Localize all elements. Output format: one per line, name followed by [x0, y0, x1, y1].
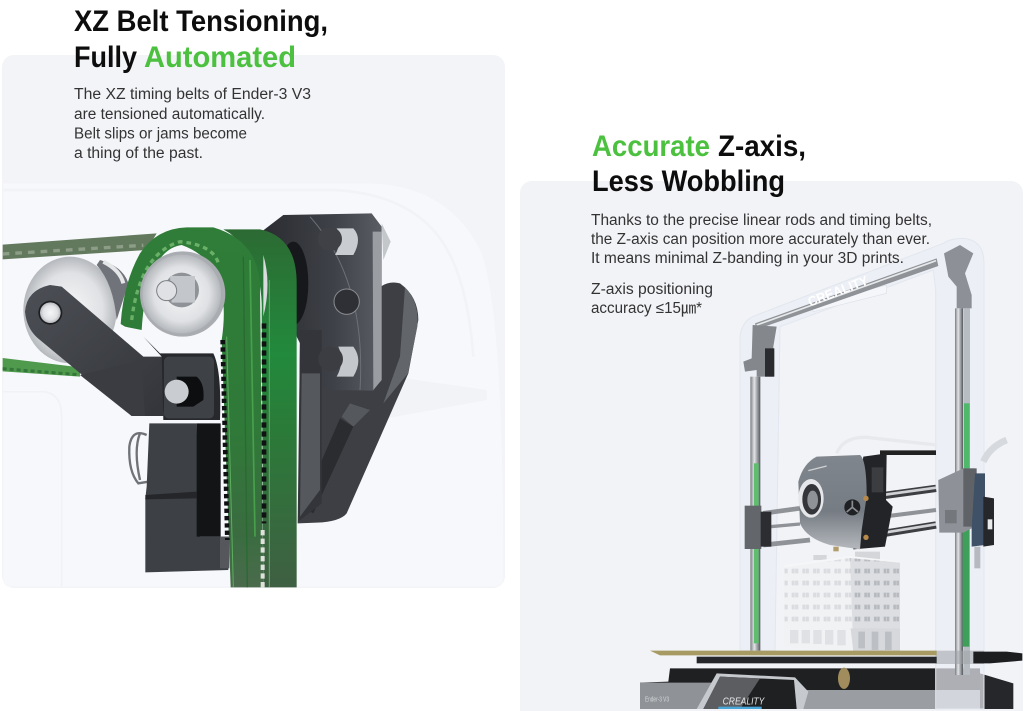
- text block: belt description: are tensioned automatically.: [74, 106, 265, 123]
- X-axis rods left: [763, 508, 810, 545]
- front green belt wrapping pulley: [121, 227, 263, 587]
- heading: XZ Belt Tensioning, Fully Automated: [74, 5, 328, 74]
- text block: belt description: Belt slips or jams become: [74, 126, 247, 142]
- text block: belt description: [74, 86, 311, 162]
- text block: Z-axis accuracy spec: [591, 281, 713, 317]
- heading: Accurate Z-axis, Less Wobbling: Accurate: [592, 130, 710, 163]
- rear bracket lobe: [298, 282, 418, 523]
- main dark bracket plate with three pins: [262, 213, 391, 522]
- ghosted translucent printer shell behind belt mechanism: [3, 183, 503, 587]
- text block: Z-axis accuracy spec: Z-axis positioning: [591, 281, 713, 298]
- top left corner bracket: [743, 325, 777, 377]
- printer base: Ender-3 V3: [645, 695, 669, 704]
- text block: belt description: The XZ timing belts of Ender-3 V3: [74, 86, 311, 103]
- control screen with CREALITY logo: [697, 673, 808, 709]
- right Z rod and green belt: [936, 308, 984, 675]
- nozzle: [833, 547, 839, 551]
- print head shroud with fan: [798, 455, 869, 549]
- heat bed plate: [650, 651, 1022, 663]
- top beam with rod: [755, 258, 938, 329]
- cable: [837, 437, 937, 453]
- printer base: [640, 668, 1013, 709]
- text block: Z-axis description: [591, 212, 932, 267]
- dark tension arm with pin: [25, 285, 163, 416]
- print head black rear: [853, 453, 893, 549]
- top right corner bracket: [944, 245, 973, 308]
- rear silver idler wheel: [23, 257, 128, 363]
- text block: Z-axis accuracy spec: accuracy ≤15㎛*: [591, 300, 702, 317]
- spring: [129, 433, 148, 483]
- second belt (rear strand): [223, 229, 297, 587]
- text block: Z-axis description: Thanks to the precise linear rods and timing belts,: [591, 212, 932, 229]
- heading: Accurate Z-axis, Less Wobbling: Less Wobbling: [592, 165, 785, 198]
- silver wheel behind belts: [263, 255, 267, 317]
- heading: Accurate Z-axis, Less Wobbling: Z-axis,: [718, 130, 806, 163]
- illustration: Ender-3 V3 printer: [640, 238, 1022, 709]
- rear upper timing belt: [3, 233, 157, 259]
- middle bracket block with pin: [143, 337, 220, 420]
- lower dark clamp block: [145, 423, 228, 572]
- left Z rod and green belt: [750, 377, 760, 651]
- control screen with CREALITY logo: CREALITY: [723, 697, 765, 708]
- panel: XZ belt tensioning background: [2, 55, 505, 588]
- top beam with rod: CREALITY: [806, 273, 870, 309]
- translucent frame: [740, 238, 984, 709]
- panel: Z-axis background: [520, 181, 1023, 711]
- rear lower timing belt: [3, 358, 80, 377]
- illustration: belt tensioner mechanism: [3, 213, 418, 587]
- heading: XZ Belt Tensioning, Fully Automated: Automated: [144, 41, 296, 74]
- text block: Z-axis description: It means minimal Z-banding in your 3D prints.: [591, 250, 904, 267]
- white printed building model: [784, 552, 900, 652]
- heading: XZ Belt Tensioning, Fully Automated: XZ Belt Tensioning,: [74, 5, 328, 38]
- left X carriage block: [745, 506, 771, 549]
- X-axis rods right: [863, 488, 936, 537]
- heading: XZ Belt Tensioning, Fully Automated: Fully: [74, 41, 138, 74]
- text block: Z-axis description: the Z-axis can position more accurately than ever.: [591, 231, 930, 248]
- centre pulley with shaft: [140, 251, 225, 337]
- heading: Accurate Z-axis, Less Wobbling: [592, 130, 806, 198]
- text block: belt description: a thing of the past.: [74, 145, 203, 162]
- rear belt teeth: [263, 280, 269, 587]
- right X carriage block: [938, 468, 994, 568]
